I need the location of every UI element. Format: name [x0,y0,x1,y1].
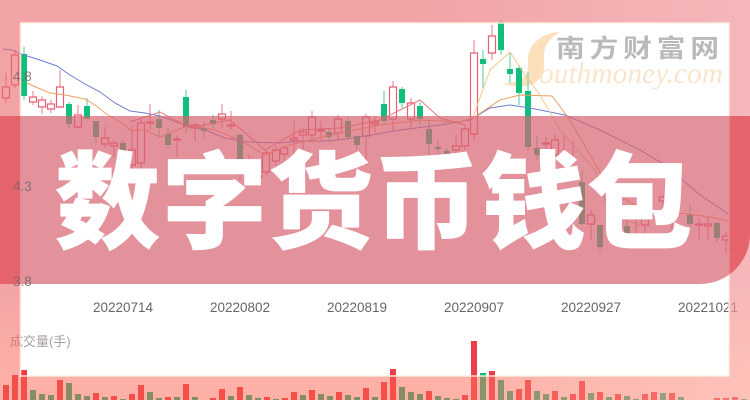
logo crescent [502,32,560,87]
date 20221021: 20221021 [678,300,738,315]
translucent title band [0,116,750,284]
date 20220714: 20220714 [93,300,154,315]
price 3.8: 3.8 [13,274,32,289]
date 20220927: 20220927 [561,300,621,315]
candlestick chart [2,20,745,255]
volume bars [3,341,747,400]
price 4.3: 4.3 [13,179,32,194]
date 20220802: 20220802 [210,300,270,315]
green candle wicks [24,20,717,250]
date 20220819: 20220819 [327,300,387,315]
volume axis label: 成交量(手) [10,334,71,349]
title: 数字货币钱包 [55,119,692,271]
red candle wicks [6,25,744,255]
red hollow candle bodies [2,36,738,250]
watermark Chinese name: 南方财富网 [556,28,724,64]
green volume bars [30,373,747,400]
date axis labels [93,300,738,315]
watermark: southmoney logo [502,28,724,90]
green candle bodies [21,22,720,247]
price 4.8: 4.8 [13,69,32,84]
moving average lines [3,49,745,225]
price axis labels [13,69,32,289]
watermark latin name: outhmoney.com [539,57,723,90]
date 20220907: 20220907 [444,300,504,315]
red volume bars [3,341,738,400]
